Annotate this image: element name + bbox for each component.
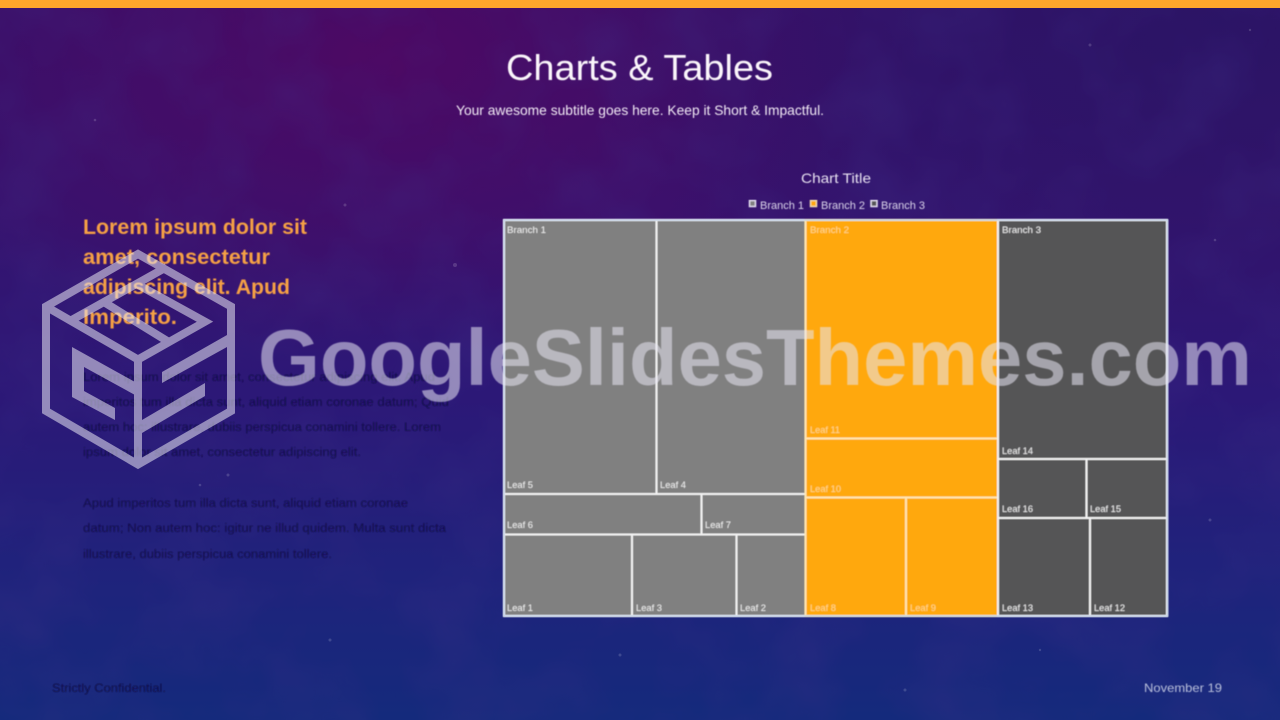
body paragraph 2: illustrare, dubiis perspicua conamini tollere. [83, 549, 332, 561]
leaf 7: Leaf 7 [705, 520, 731, 530]
branch 3 group [998, 220, 1167, 616]
leaf 6 [504, 494, 702, 534]
leaf 11: Branch 2 [810, 225, 849, 235]
body paragraph 1: imperitos tum illa dicta sunt, aliquid etiam coronae datum; Quid [83, 397, 449, 409]
leaf 3: Leaf 3 [636, 603, 662, 613]
treemap chart [504, 220, 1167, 616]
leaf 12 [1090, 518, 1167, 616]
watermark logo [46, 254, 231, 464]
footer left: Strictly Confidential. [52, 681, 166, 695]
leaf 4: Leaf 4 [660, 480, 686, 490]
body paragraph 1 [83, 372, 449, 459]
branch 1 group [504, 220, 806, 616]
leaf 12: Leaf 12 [1094, 603, 1125, 613]
leaf 11 [806, 220, 998, 438]
leaf 6: Leaf 6 [507, 520, 533, 530]
treemap outer border [504, 220, 1168, 616]
leaf 5: Branch 1 [507, 225, 546, 235]
legend: Branch 1 [760, 200, 804, 212]
watermark text: GoogleSlidesThemes.com [258, 313, 1252, 402]
leaf 3 [632, 534, 736, 616]
leaf 14: Leaf 14 [1002, 446, 1033, 456]
leaf 15: Leaf 15 [1090, 504, 1121, 514]
leaf 8 [806, 498, 906, 616]
leaf 1: Leaf 1 [507, 603, 533, 613]
leaf 5 [504, 220, 656, 494]
leaf 4 [656, 220, 806, 494]
body paragraph 2: Apud imperitos tum illa dicta sunt, aliquid etiam coronae [83, 498, 408, 510]
leaf 8: Leaf 8 [810, 603, 836, 613]
leaf 14: Branch 3 [1002, 225, 1041, 235]
leaf 10: Leaf 10 [810, 484, 841, 494]
body paragraph 2: datum; Non autem hoc: igitur ne illud quidem. Multa sunt dicta [83, 523, 447, 535]
legend: Branch 2 [821, 200, 865, 212]
chart title: Chart Title [801, 170, 871, 186]
leaf 16: Leaf 16 [1002, 504, 1033, 514]
legend: Branch 3 [881, 200, 925, 212]
footer date: November 19 [1144, 681, 1222, 695]
leaf 5: Leaf 5 [507, 480, 533, 490]
leaf 10 [806, 438, 998, 498]
leaf 2: Leaf 2 [740, 603, 766, 613]
leaf 1 [504, 534, 632, 616]
title: Charts & Tables [506, 47, 773, 88]
leaf 13 [998, 518, 1090, 616]
leaf 14 [998, 220, 1167, 459]
branch 2 group [806, 220, 998, 616]
subtitle: Your awesome subtitle goes here. Keep it Short & Impactful. [456, 102, 824, 118]
leaf 9: Leaf 9 [910, 603, 936, 613]
leaf 13: Leaf 13 [1002, 603, 1033, 613]
leaf 11: Leaf 11 [810, 425, 840, 435]
left heading [83, 216, 307, 329]
body paragraph 1: ipsum dolor sit amet, consectetur adipiscing elit. [83, 447, 361, 459]
body paragraph 2 [83, 498, 447, 561]
left heading: adipiscing elit. Apud [83, 276, 290, 299]
left heading: Lorem ipsum dolor sit [83, 216, 307, 239]
body paragraph 1: Lorem ipsum dolor sit amet, consectetur adipiscing elit. Apud [83, 372, 435, 384]
body paragraph 1: autem hoc: illustrare, dubiis perspicua conamini tollere. Lorem [83, 422, 441, 434]
leaf 2 [736, 534, 806, 616]
left heading: amet, consectetur [83, 246, 270, 269]
leaf 7 [702, 494, 806, 534]
top accent bar [0, 0, 1280, 8]
leaf 9 [906, 498, 998, 616]
leaf 16 [998, 459, 1086, 518]
leaf 15 [1086, 459, 1167, 518]
legend [750, 200, 925, 212]
left heading: Imperito. [83, 306, 177, 329]
